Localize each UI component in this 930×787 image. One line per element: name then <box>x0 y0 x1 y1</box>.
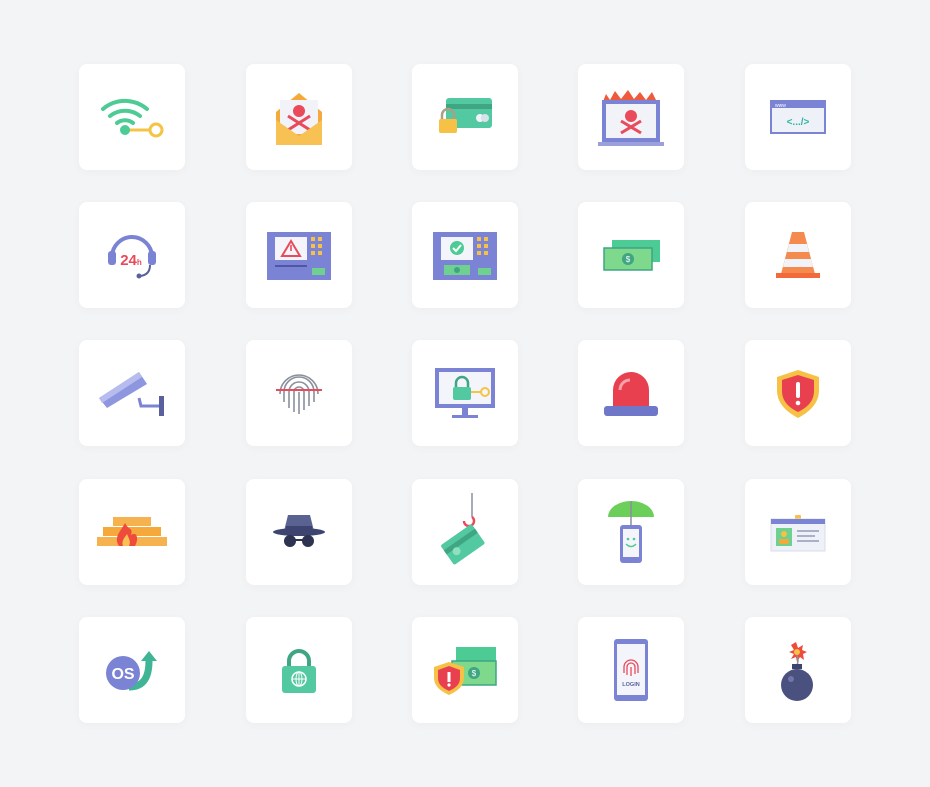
card: ATM warning <box>246 202 352 308</box>
card: locked card <box>412 64 518 170</box>
icon: OS circle arrow: OS <box>111 666 135 683</box>
icon: padlock globe <box>282 651 316 693</box>
card: phishing <box>412 479 518 585</box>
card: monitor lock <box>412 340 518 446</box>
card: firewall <box>79 479 185 585</box>
icon: headset 24h: 24h <box>120 252 142 269</box>
icon: hook card <box>440 493 485 565</box>
card: phone login <box>578 617 684 723</box>
icon: wifi key <box>103 101 162 136</box>
icon: shield exclamation <box>777 370 819 418</box>
icon: spy hat glasses <box>273 515 325 547</box>
card: CCTV <box>79 340 185 446</box>
card: traffic cone <box>745 202 851 308</box>
card: email virus <box>246 64 352 170</box>
icon: cone <box>776 232 820 278</box>
icon: browser code <box>771 101 825 133</box>
card: code browser <box>745 64 851 170</box>
icon: ATM check <box>433 232 497 280</box>
card: ID badge <box>745 479 851 585</box>
icon: phone fingerprint login: LOGIN <box>622 682 640 688</box>
icon: envelope skull <box>276 93 322 145</box>
card: money <box>578 202 684 308</box>
card: wifi key <box>79 64 185 170</box>
card: OS update <box>79 617 185 723</box>
card: shield alert <box>745 340 851 446</box>
card: 24h support <box>79 202 185 308</box>
icon: cash bills: $ <box>626 255 631 264</box>
card: hacked laptop <box>578 64 684 170</box>
icon: shield cash: $ <box>472 669 477 678</box>
icon: monitor padlock <box>435 368 495 418</box>
icon: credit card lock <box>439 98 492 133</box>
icon: ATM warning <box>267 232 331 280</box>
icon: bomb <box>781 642 813 701</box>
icon: alarm siren <box>604 372 658 416</box>
card: ATM success <box>412 202 518 308</box>
icon: browser code: <.../> <box>787 117 810 128</box>
icon: bricks fire <box>97 517 167 546</box>
icon: browser code: www <box>775 103 786 109</box>
card: money shield <box>412 617 518 723</box>
card: fingerprint <box>246 340 352 446</box>
icon: ID card <box>771 515 825 551</box>
icon: security camera <box>99 372 164 416</box>
icon: fingerprint scan <box>280 375 318 414</box>
card: globe padlock <box>246 617 352 723</box>
icon: laptop fire skull <box>598 90 664 146</box>
card: bomb <box>745 617 851 723</box>
card: siren <box>578 340 684 446</box>
card: spy <box>246 479 352 585</box>
card: phone umbrella <box>578 479 684 585</box>
icon: phone umbrella <box>608 501 654 563</box>
